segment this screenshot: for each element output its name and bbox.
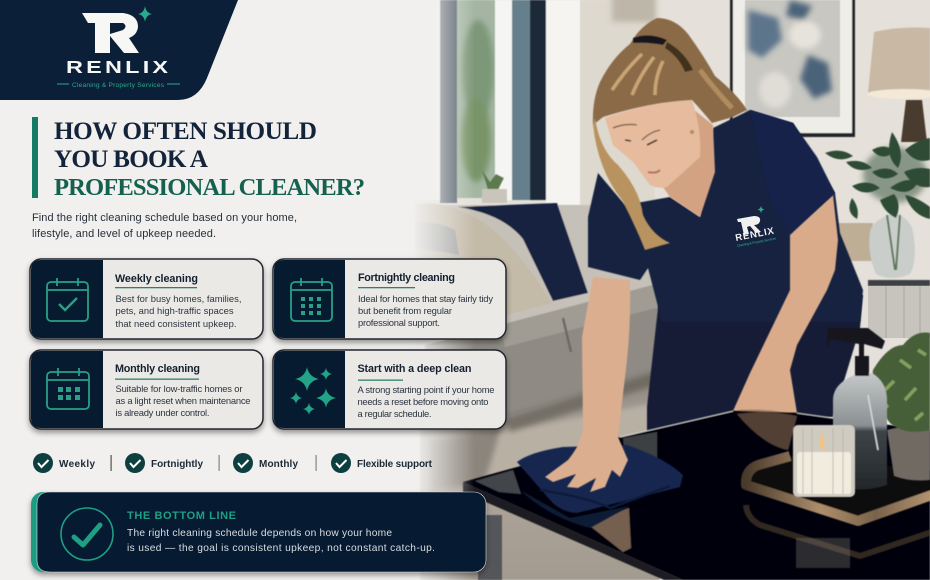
- icon: calendar with check: [47, 278, 88, 321]
- intro text: lifestyle, and level of upkeep needed.: [32, 228, 216, 240]
- card: start with a deep clean: [273, 350, 506, 429]
- card: monthly cleaning: Suitable for low-traffic homes or: [116, 383, 242, 394]
- check: flexible support: Flexible support: [357, 459, 433, 470]
- card: fortnightly cleaning: but benefit from regular: [358, 305, 452, 316]
- card: start with a deep clean: a regular schedule.: [358, 408, 432, 419]
- photo: cleaner wiping a table in a living room: [400, 0, 930, 580]
- logo mark: R: [82, 13, 139, 53]
- icon: calendar with nine-square grid: [291, 278, 332, 321]
- fade from photo into left panel: [395, 0, 475, 580]
- card: monthly cleaning: is already under control.: [116, 407, 210, 418]
- logo tagline: Cleaning & Property Services: [72, 82, 165, 89]
- check: weekly: Weekly: [59, 459, 95, 470]
- table lamp: [867, 28, 930, 142]
- check: monthly: Monthly: [259, 459, 298, 470]
- card: weekly cleaning: Best for busy homes, families,: [116, 293, 242, 304]
- title: [32, 117, 365, 201]
- rug and floor: [420, 365, 660, 580]
- callout: the bottom line: [31, 492, 486, 572]
- green plant and pot: [873, 332, 930, 480]
- card: weekly cleaning: that need consistent upkeep.: [116, 318, 236, 329]
- card: start with a deep clean: Start with a deep clean: [358, 363, 472, 375]
- sofa and cushions: [415, 203, 665, 427]
- person: trousers: [647, 290, 863, 432]
- card: weekly cleaning: Weekly cleaning: [115, 273, 198, 285]
- card: monthly cleaning: as a light reset when maintenance: [116, 395, 250, 406]
- person: right arm and hand: [733, 195, 838, 417]
- photo background: wall: [400, 0, 930, 400]
- intro text: [32, 212, 297, 240]
- callout: the bottom line: is used — the goal is consistent upkeep, not constant catch-up.: [127, 543, 435, 554]
- intro text: Find the right cleaning schedule based on your home,: [32, 212, 297, 224]
- card: monthly cleaning: [30, 350, 263, 429]
- lit candle: [793, 425, 855, 497]
- vase with green plant: [825, 132, 930, 278]
- checklist row: [33, 453, 433, 473]
- icon: circled check: [61, 508, 113, 560]
- serving tray: [746, 456, 930, 568]
- title: PROFESSIONAL CLEANER?: [54, 174, 365, 201]
- window and garden view: [400, 0, 656, 205]
- box behind vase: [838, 223, 873, 261]
- card: start with a deep clean: needs a reset before moving onto: [358, 396, 488, 407]
- icon: sparkles: [290, 367, 336, 415]
- card: start with a deep clean: A strong starting point if your home: [358, 384, 494, 395]
- check: flexible support: [331, 453, 433, 473]
- person: right sleeve: [750, 110, 835, 235]
- card: weekly cleaning: [30, 259, 263, 339]
- card: fortnightly cleaning: [273, 259, 506, 339]
- icon: calendar with six-square grid: [47, 368, 89, 409]
- card: weekly cleaning: pets, and high-traffic spaces: [116, 305, 234, 316]
- title: YOU BOOK A: [54, 146, 208, 173]
- spray bottle: [827, 328, 887, 490]
- small window-sill plant: [482, 170, 504, 190]
- check: monthly: [233, 453, 298, 473]
- check: weekly: [33, 453, 95, 473]
- glass table: [463, 411, 930, 580]
- person: torso and left sleeve of polo shirt: [588, 110, 863, 322]
- shirt logo: [734, 206, 777, 248]
- callout: the bottom line: THE BOTTOM LINE: [127, 510, 236, 522]
- check: fortnightly: Fortnightly: [151, 459, 203, 470]
- shirt logo: RENLIX: [734, 226, 776, 244]
- card: fortnightly cleaning: Fortnightly cleaning: [358, 272, 455, 284]
- shirt logo: Cleaning & Property Services: [736, 236, 777, 248]
- card: fortnightly cleaning: professional support.: [358, 317, 440, 328]
- person: hair and ponytail: [593, 18, 747, 250]
- person: left arm and hand: [545, 277, 630, 492]
- framed painting on the wall: [730, 0, 855, 137]
- logo panel: [0, 0, 238, 100]
- card: fortnightly cleaning: Ideal for homes that stay fairly tidy: [358, 293, 493, 304]
- logo sparkle: [138, 6, 152, 22]
- title: HOW OFTEN SHOULD: [54, 118, 317, 145]
- hand on cloth: [545, 429, 628, 492]
- callout: the bottom line: The right cleaning schedule depends on how your home: [127, 528, 392, 539]
- side table: [868, 280, 930, 286]
- logo wordmark: RENLIX: [66, 57, 168, 77]
- navy cleaning cloth: [517, 445, 683, 528]
- person: neck and face: [605, 100, 715, 217]
- check: fortnightly: [125, 453, 203, 473]
- card: monthly cleaning: Monthly cleaning: [115, 363, 200, 375]
